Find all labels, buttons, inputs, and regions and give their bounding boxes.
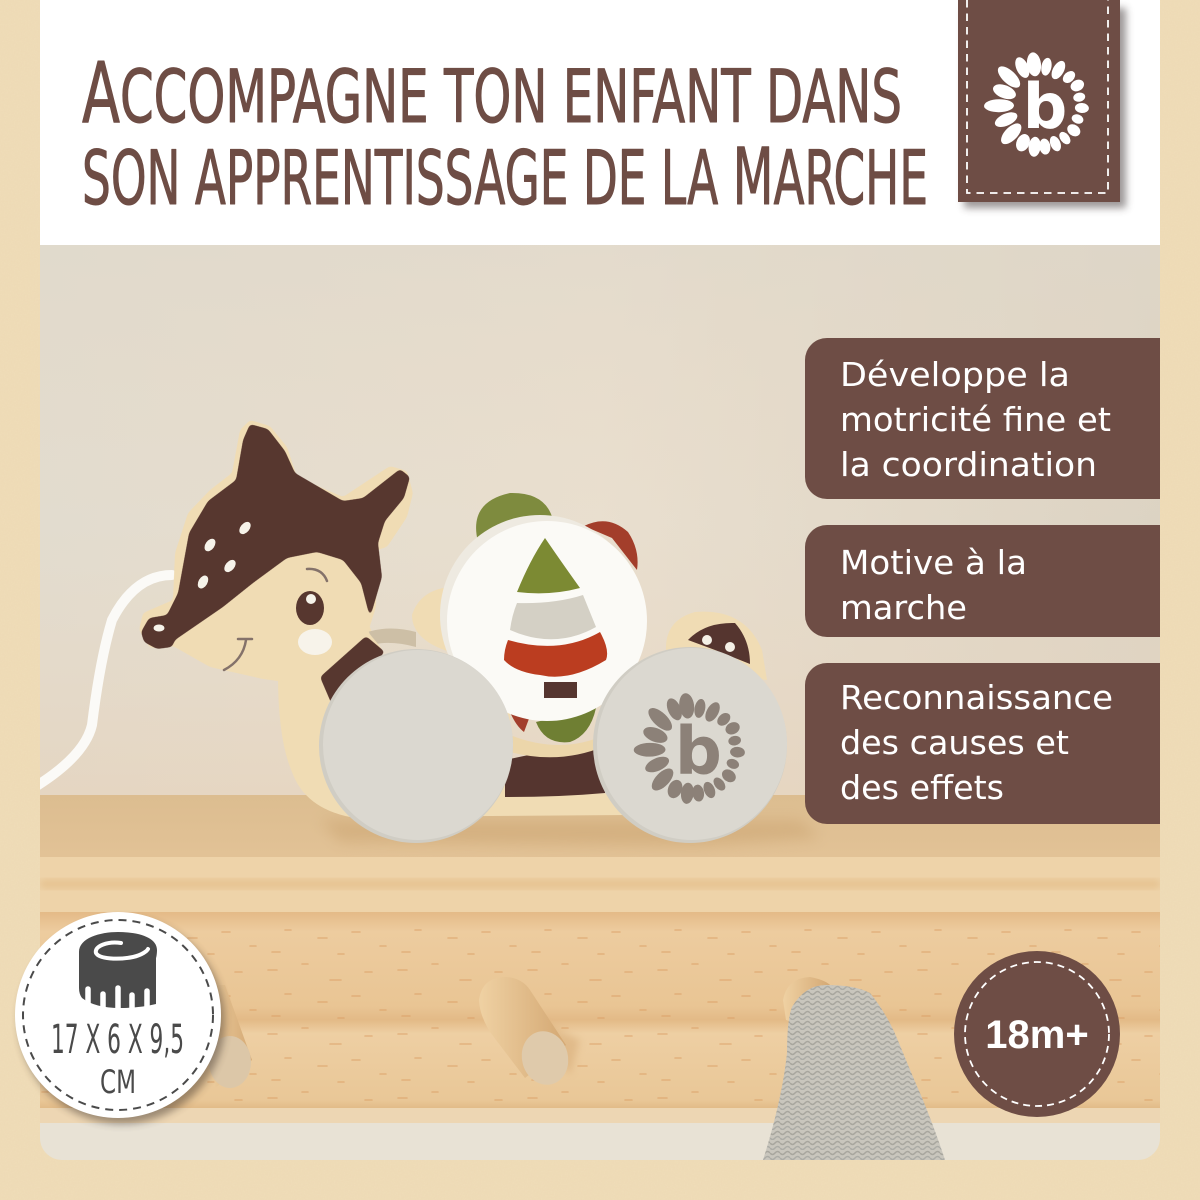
feature 1: la coordination [840,445,1097,484]
fawn head [139,420,413,690]
peg right [783,977,830,1025]
feature 3: Reconnaissance [840,678,1113,717]
tree: trunk [544,682,577,698]
photo: shelf scene [38,245,1160,1160]
feature 3: des causes et [840,723,1069,762]
feature 1 [805,338,1160,499]
badge: dimensions [15,912,225,1124]
dimensions text [51,1017,184,1101]
green leaf lower [536,708,596,742]
logo on wheel: b [675,713,722,789]
brow [307,569,327,581]
lower wall [40,1123,1160,1160]
lower shelf edge [40,1108,1160,1123]
title line 1: ACCOMPAGNE TON ENFANT DANS [82,44,902,142]
tail [666,612,767,680]
peg centre [479,977,580,1090]
neck collar [321,637,384,701]
fawn face mask [141,424,410,649]
toy: fawn pull-along [139,420,787,843]
feature 1: Développe la [840,355,1070,394]
badge: age: 18m+ [985,1013,1089,1057]
white disc [447,521,647,721]
red leaf [584,521,638,570]
shelf front edge [40,857,1160,912]
brand logo [984,52,1089,157]
knitted mitten [763,985,945,1160]
rear arc [367,628,416,647]
right wheel [593,647,787,843]
back arch [512,736,594,758]
cheek [298,629,332,655]
brand logo: b [1023,70,1067,143]
knob [412,588,446,651]
green leaf top [476,493,552,538]
base stripe [505,750,605,797]
left wheel [319,649,513,843]
dimensions text: 17 X 6 X 9,5 [51,1017,184,1063]
smile [224,639,252,670]
feature 2 [805,525,1160,637]
feature 3 [805,663,1160,824]
tree: base [504,632,607,677]
logo on wheel [634,692,745,804]
feature 3: des effets [840,768,1004,807]
brand tag [958,0,1126,208]
tree: top [517,538,580,593]
peg left [205,985,252,1088]
feature 2: Motive à la [840,543,1027,582]
wood panel [40,912,1160,1108]
fawn body [278,625,625,817]
back disc [440,515,607,656]
feature 1: motricité fine et [840,400,1111,439]
dimensions text: CM [100,1063,136,1101]
title [82,44,928,223]
shelf top [40,795,1160,857]
eye [296,591,324,625]
badge: age [954,951,1120,1117]
pull string [38,575,172,785]
tree: middle [510,595,596,639]
wall [40,245,1160,800]
icon: measuring tape [79,932,157,1012]
head spots [154,520,253,632]
toy shadow on shelf [320,820,820,846]
wood speckle [40,925,1160,1105]
title line 2: SON APPRENTISSAGE DE LA MARCHE [82,133,928,223]
feature 2: marche [840,588,967,627]
red leaf lower [511,714,529,732]
header band [40,0,1160,245]
